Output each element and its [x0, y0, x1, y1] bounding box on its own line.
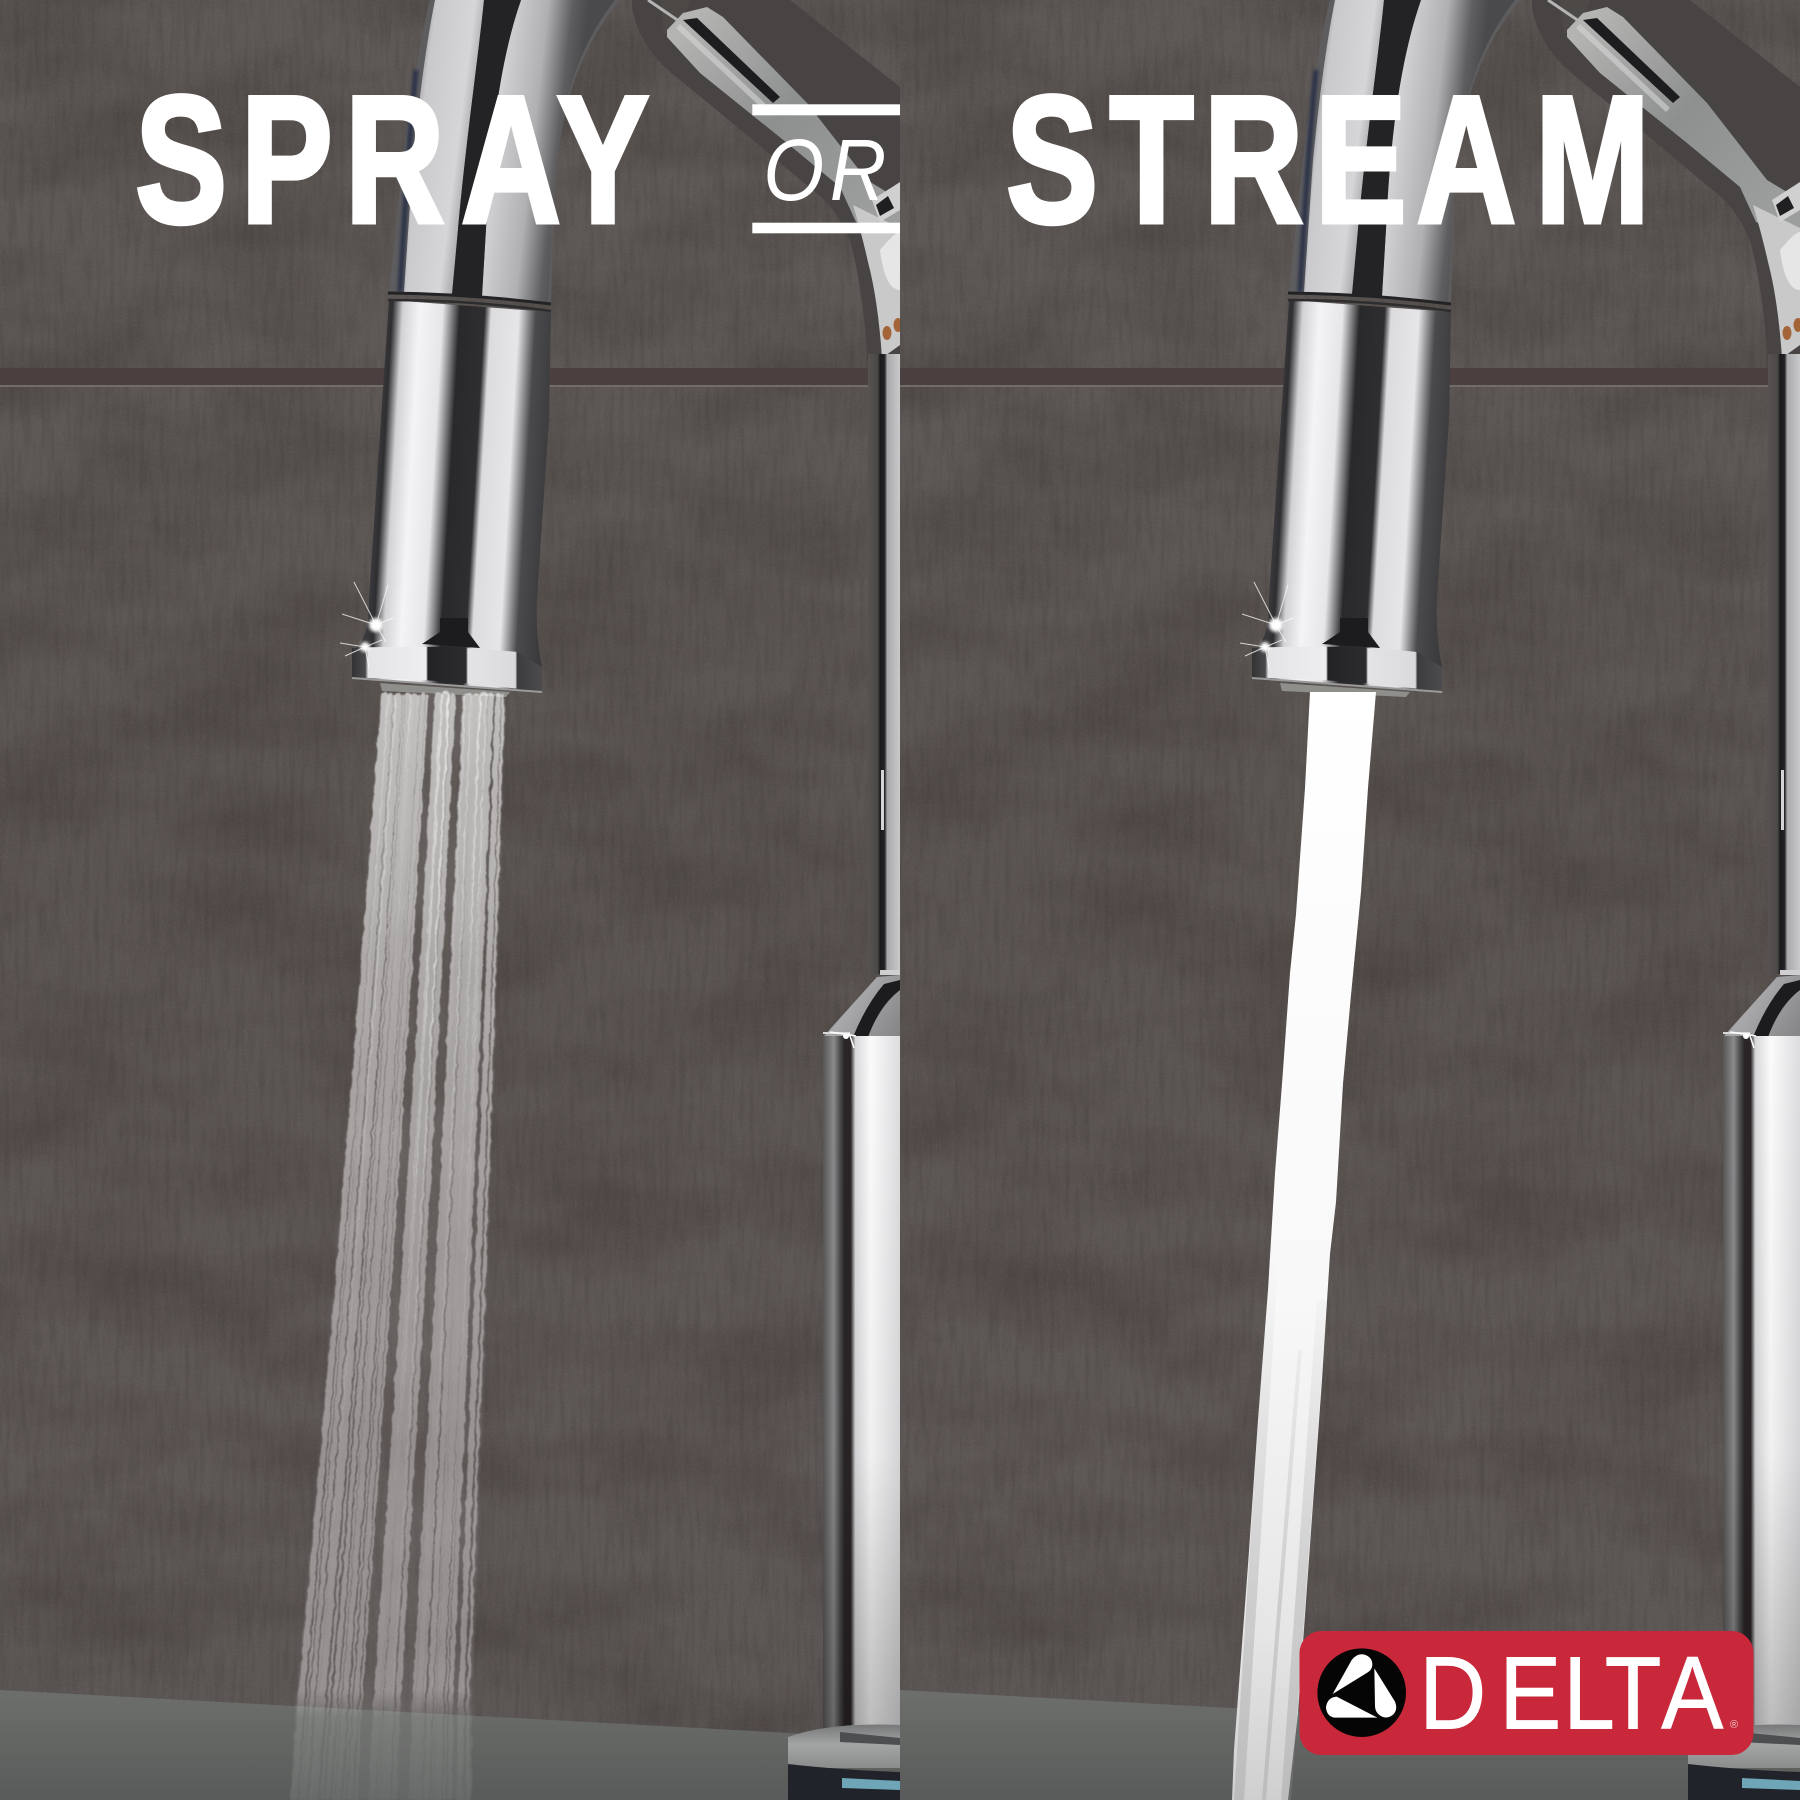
registered mark: ® — [1730, 1719, 1738, 1731]
wordmark: DELTA: DELTA — [1419, 1635, 1724, 1751]
title word: STREAM: STREAM — [1006, 59, 1650, 261]
divider label: OR: OR — [763, 121, 886, 219]
title word: SPRAY: SPRAY — [135, 59, 649, 261]
panel: spray — [0, 0, 902, 1800]
icon: Delta triangle mark — [1317, 1648, 1406, 1737]
water spray — [290, 694, 506, 1800]
faucet with spray head — [340, 0, 902, 1800]
panel: stream — [900, 0, 1800, 1800]
water stream — [1232, 692, 1376, 1800]
logo: Delta badge — [1300, 1631, 1754, 1755]
divider label: OR — [752, 104, 900, 233]
faucet with stream head — [1240, 0, 1800, 1800]
